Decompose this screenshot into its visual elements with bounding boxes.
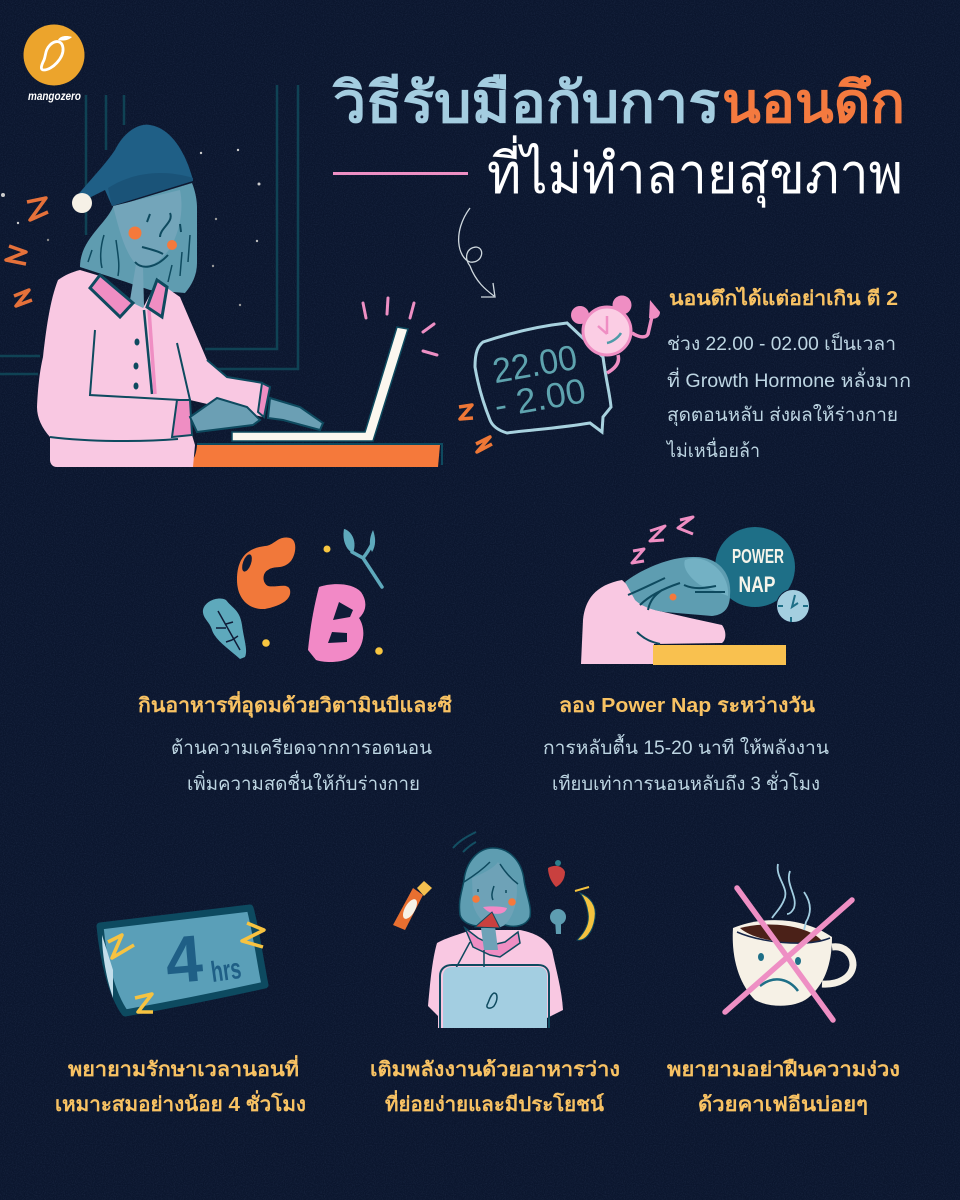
title: นอนดึก xyxy=(722,71,905,134)
collar xyxy=(90,275,133,317)
text block: healthy snack tip xyxy=(370,1058,620,1116)
hair xyxy=(80,183,197,293)
text block: healthy snack tip: ที่ย่อยง่ายและมีประโยชน์ xyxy=(385,1089,604,1116)
text block: caffeine tip: ด้วยคาเฟอีนบ่อยๆ xyxy=(698,1093,868,1116)
text block: healthy snack tip: เติมพลังงานด้วยอาหารว่าง xyxy=(370,1058,620,1081)
text block: vitamin tip xyxy=(138,690,452,795)
text block: caffeine tip: พยายามอย่าฝืนความง่วง xyxy=(667,1058,900,1081)
title xyxy=(332,71,905,208)
icon: pillow with 4 hrs: hrs xyxy=(209,953,243,989)
icon: woman power napping at desk: NAP xyxy=(738,572,776,597)
text block: late sleep tip xyxy=(665,286,911,462)
desk xyxy=(185,445,440,467)
text block: caffeine tip xyxy=(667,1058,900,1116)
icon: pillow with 4 hrs: 4 xyxy=(162,921,206,997)
illustration: window behind woman xyxy=(0,85,298,374)
icon: alarm clock and speech bubble 22.00-2.00 xyxy=(459,296,660,452)
text block: late sleep tip: นอนดึกได้แต่อย่าเกิน ตี 2 xyxy=(669,286,898,310)
text block: power nap tip: ลอง Power Nap ระหว่างวัน xyxy=(559,695,815,717)
icon: alarm clock and speech bubble 22.00-2.00: - 2.00 xyxy=(491,371,589,426)
text block: vitamin tip: เพิ่มความสดชื่นให้กับร่างกาย xyxy=(187,770,420,795)
text block: power nap tip: เทียบเท่าการนอนหลับถึง 3 ชั่วโมง xyxy=(552,770,820,795)
screen glow xyxy=(363,298,437,355)
icon: woman power napping at desk: POWER xyxy=(732,546,784,568)
hands xyxy=(190,398,260,432)
logo: mangozero xyxy=(24,24,84,103)
text block: late sleep tip: ไม่เหนื่อยล้า xyxy=(665,437,760,462)
icon: woman snacking at laptop xyxy=(393,832,595,1028)
text block: vitamin tip: กินอาหารที่อุดมด้วยวิตามินบีและซี xyxy=(138,690,452,718)
pajama body xyxy=(37,270,270,467)
icon: coffee cup crossed out xyxy=(725,864,853,1020)
arrow pointing to first tip xyxy=(459,208,495,297)
icon: pillow with 4 hrs xyxy=(100,908,265,1013)
text block: sleep 4 hours tip: พยายามรักษาเวลานอนที่ xyxy=(68,1054,299,1081)
icon: vitamin C and B letters with leaves xyxy=(203,529,383,662)
illustration: woman working late at laptop xyxy=(6,125,442,467)
logo: mangozero: mangozero xyxy=(28,91,81,103)
icon: woman power napping at desk xyxy=(581,517,810,665)
face xyxy=(113,190,181,310)
text block: power nap tip xyxy=(543,695,829,795)
title: ที่ไม่ทำลายสุขภาพ xyxy=(487,135,903,208)
text block: vitamin tip: ต้านความเครียดจากการอดนอน xyxy=(171,737,432,759)
laptop xyxy=(232,327,408,441)
sleeve cuffs xyxy=(172,400,192,437)
icon: alarm clock and speech bubble 22.00-2.00: 22.00 xyxy=(490,338,580,391)
text block: late sleep tip: สุดตอนหลับ ส่งผลให้ร่างกาย xyxy=(667,404,898,427)
title: วิธีรับมือกับการ xyxy=(332,71,720,134)
text block: sleep 4 hours tip: เหมาะสมอย่างน้อย 4 ชั่วโมง xyxy=(55,1089,306,1116)
sleep cap xyxy=(76,125,193,206)
text block: late sleep tip: ที่ Growth Hormone หลั่งมาก xyxy=(667,367,911,392)
text block: late sleep tip: ช่วง 22.00 - 02.00 เป็นเวลา xyxy=(667,331,896,355)
text block: sleep 4 hours tip xyxy=(55,1054,306,1116)
sleepy z marks xyxy=(6,198,48,306)
text block: power nap tip: การหลับตื้น 15-20 นาที ให้พลังงาน xyxy=(543,734,829,759)
